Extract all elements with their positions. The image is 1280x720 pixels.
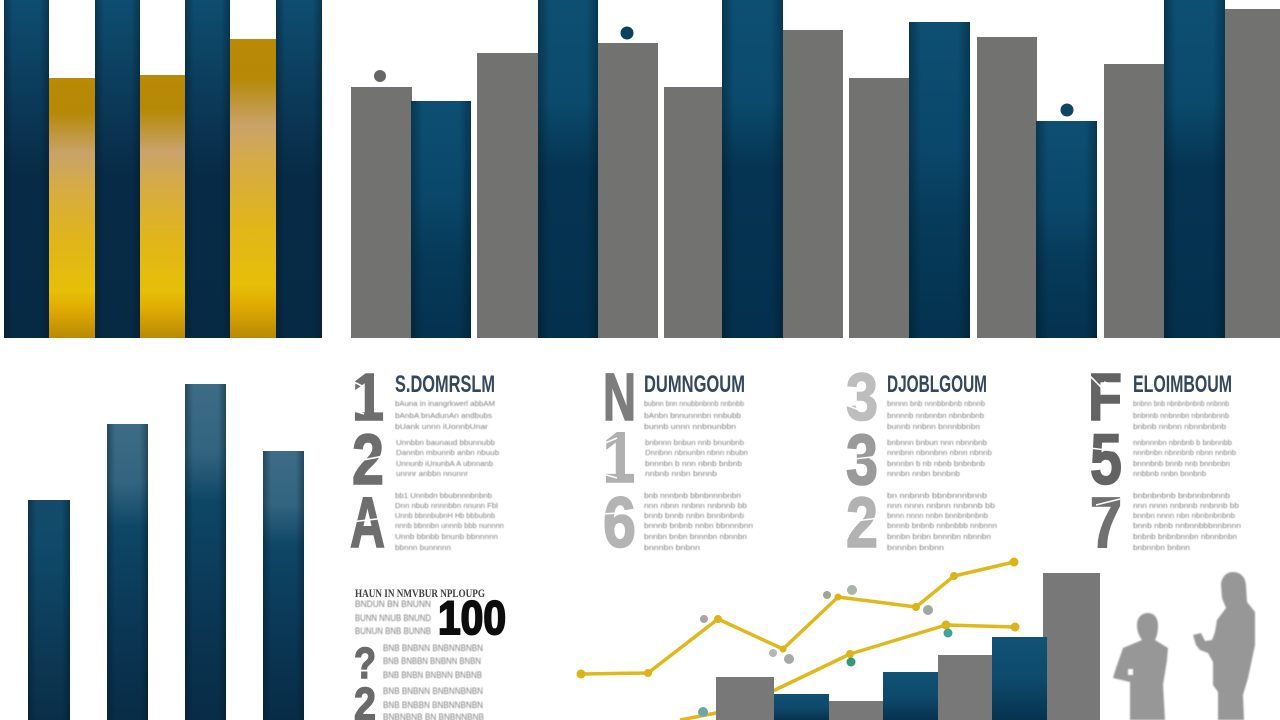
body text column 3: bnnbn bnbn bnnnbn nbnnbn: [887, 532, 991, 541]
bottom intro text: BUNUN BNB BUNNB: [355, 626, 431, 637]
numerals column 4: 7: [1090, 484, 1122, 563]
gold bars: [49, 39, 276, 338]
bottom intro text: BNDUN BN BNUNN: [355, 599, 431, 610]
body text column 1: bAnbA bnAdunAn andbubs: [395, 411, 492, 420]
body text column 2: bnb nnnbnb bbnbnnnbnbn: [644, 491, 741, 500]
bottom body text: BNB BNBN BNBNN BNBNB: [383, 670, 482, 681]
body text column 1: bbnnn bunnnnn: [395, 543, 451, 552]
body text column 1: bUank unnn iUonnbUnar: [395, 422, 489, 431]
numerals column 3: 3: [846, 360, 878, 435]
numerals column 2: [603, 360, 636, 563]
body text column 3: bnbnnn bnbun nnn nbnnbnb: [887, 438, 987, 447]
panel: navy and gold bar chart: [4, 0, 322, 338]
lower gold line: [680, 620, 1020, 720]
body text column 1: Unnunb iUnunbA A ubnnanb: [396, 459, 493, 468]
body text column 1: Unnb bbnnbubnH Hb bbbubnb: [395, 511, 495, 520]
body text column 4: bnbnnb nnbnnbn nbnbnbnnb: [1133, 411, 1229, 420]
small markers: [698, 585, 952, 717]
numerals column 4: 5: [1090, 421, 1122, 500]
marker dots: [374, 26, 1074, 116]
body text column 4: bnbnb bnbnbnnbn nbnnbnbn: [1133, 532, 1237, 541]
bottom block title: HAUN IN NMVBUR NPLOUPG: [355, 586, 485, 600]
body text column 2: Dnnbnn nbnunbn nbnn nbubn: [645, 448, 748, 457]
body text column 2: bnnbn bnbn bnnnbn nbnnbn: [644, 532, 747, 541]
big number: 100: [438, 591, 506, 644]
body text column 1: Unnbbn baunaud bbunnubb: [396, 438, 495, 447]
body text column 3: bnnnnb nnbnnbn nbnbnbnb: [887, 411, 984, 420]
panel: text column 3: [846, 360, 997, 563]
body text column 4: nnbbnb nnbn bnnbnb: [1133, 469, 1206, 478]
body text column 3: bn nnbnnb bbnbnnnbnnb: [887, 491, 987, 500]
panel: text column 1: [350, 360, 504, 563]
icon: presenter silhouette: [1193, 572, 1255, 720]
heading column 4: ELOIMBOUM: [1133, 371, 1232, 398]
numerals column 1: [350, 360, 385, 563]
body text column 4: [1133, 399, 1241, 552]
heading column 3: DJOBLGOUM: [887, 371, 987, 398]
body text column 3: nnnbnn nbnnbnn nbnn nbnnb: [887, 448, 992, 457]
numerals column 2: 1: [603, 419, 635, 498]
body text column 1: unnnr anbbn nnunnr: [396, 469, 469, 478]
body text column 1: Dannbn mbunnb anbn nbuub: [396, 448, 499, 457]
body text column 3: bnnnbn b nb nbnb bnbnbnb: [887, 459, 985, 468]
numerals column 2: 6: [603, 484, 636, 563]
heading column 1: S.DOMRSLM: [395, 371, 495, 398]
panel: line and bar combo chart: [576, 558, 1100, 720]
body text column 3: [887, 399, 997, 552]
panel: text column 4: [1088, 360, 1241, 563]
panel: text column 2: [602, 360, 753, 563]
body text column 4: bnnb nbnb nnbnnbbbnnbnnn: [1133, 521, 1241, 530]
body text column 2: bnnnbn b nnn nbnb bnbnb: [645, 459, 742, 468]
body text column 4: nnn nnnn nnbnnb nnbnnb bb: [1133, 501, 1239, 510]
body text column 1: [395, 399, 504, 552]
body text column 2: bnnnb bnbnb nnbn bbnnnbnn: [644, 521, 753, 530]
numerals column 1: 2: [352, 421, 384, 500]
panel: gray and blue bar chart: [351, 0, 1280, 338]
bottom numerals: [354, 639, 376, 720]
body text column 3: bnnnbn bnbnn: [887, 543, 944, 552]
heading column 2: DUMNGOUM: [644, 371, 745, 398]
body text column 2: nnbnb nnbn bnnnb: [645, 469, 717, 478]
body text column 2: bnnb bnnb nnbn bnnbnbnb: [644, 511, 744, 520]
body text column 1: bb1 Unnbdn bbubnnnbnbnb: [395, 491, 492, 500]
body text column 4: nnbnnnbn nbnbnb b bnbnnbb: [1133, 438, 1232, 447]
bottom body text: [383, 643, 484, 720]
numerals column 4: [1088, 360, 1122, 563]
navy bars: [4, 0, 322, 338]
body text column 2: nnn nbnn nnbnn nnbnnb bb: [644, 501, 747, 510]
bottom body text: BNB BNBNN BNBNNBNBN: [383, 686, 483, 697]
body text column 4: bnbnnbn bnbnn: [1133, 543, 1190, 552]
body text column 3: nnnbn nnbn bnnbnb: [887, 469, 960, 478]
bottom body text: BNB BNBNN BNBNNBNBN: [383, 643, 483, 654]
bottom body text: BNB BNBBN BNBNN BNBN: [383, 656, 481, 667]
body text column 4: bnnbn nnnn nbn nbnbnbnbnb: [1133, 511, 1235, 520]
body text column 2: bnnnbn bnbnn: [644, 543, 700, 552]
body text column 1: Dnn nbub nnnnbbn nnunn Fbl: [395, 501, 498, 510]
panel: bottom text block: [354, 586, 506, 720]
blue bars: [411, 0, 1225, 338]
numerals column 3: 2: [846, 484, 878, 563]
gray bars: [351, 9, 1280, 338]
body text column 3: bnnnb bnbnb nnbnbbb nnbnnn: [887, 521, 997, 530]
body text column 4: bnbnn bnb nbnbnbnbnb nnbnnb: [1133, 399, 1229, 408]
numerals column 4: F: [1088, 360, 1122, 435]
numerals column 3: [846, 360, 878, 563]
numerals column 1: 1: [352, 360, 384, 435]
body text column 4: bnnnbnb bnnb nnb bnnbnbn: [1133, 459, 1230, 468]
body text column 4: bnbnb nnbnn nbnnbnbnb: [1133, 422, 1226, 431]
body text column 4: nnnbnbn nbnnbnb nbnn nnbnb: [1133, 448, 1236, 457]
gray combo bars: [716, 573, 1100, 720]
body text column 3: bnnn nnnn nnbn bnnbnbnbnb: [887, 511, 988, 520]
bottom intro text: BUNN NNUB BNUND: [355, 613, 431, 624]
bottom body text: BNB BNBBN BNBNNBNBN: [383, 700, 483, 711]
upper gold line: [576, 558, 1018, 678]
body text column 2: [644, 399, 753, 552]
bottom intro text: [355, 599, 431, 637]
body text column 2: bunnb unnn nnbnunbbn: [644, 422, 736, 431]
numerals column 1: A: [350, 484, 385, 563]
body text column 3: bunnb nnbnn bnnnbbnbn: [887, 422, 980, 431]
body text column 2: bAnbn bnnunnnbn nnbubb: [644, 411, 741, 420]
panel: lower left bar chart: [28, 384, 304, 720]
body text column 1: nnnb bbnnbn unnnb bbb nunnnn: [395, 521, 504, 530]
body text column 1: Unnb bbnbb bnunb bbnnnnn: [395, 532, 498, 541]
body text column 2: bnbnnn bnbun nnb bnunbnb: [645, 438, 744, 447]
body text column 4: bnbnbnbnb bnbnnbnbnnb: [1133, 491, 1230, 500]
body text column 3: nnn nnnn nnbnn nnbnnb bb: [887, 501, 995, 510]
icon: standing person silhouette: [1113, 613, 1168, 720]
body text column 3: bnnnn bnb nnnbbnbnb nbnnb: [887, 399, 985, 408]
blue combo bars: [774, 637, 1047, 720]
bottom numerals: ?: [354, 639, 376, 688]
numerals column 2: N: [603, 360, 636, 435]
body text column 2: bubnn bnn nnubbnbnnb nnbnbb: [644, 399, 744, 408]
numerals column 3: 3: [846, 421, 878, 500]
body text column 1: bAuna in inangrkwerl abbAM: [395, 399, 495, 408]
